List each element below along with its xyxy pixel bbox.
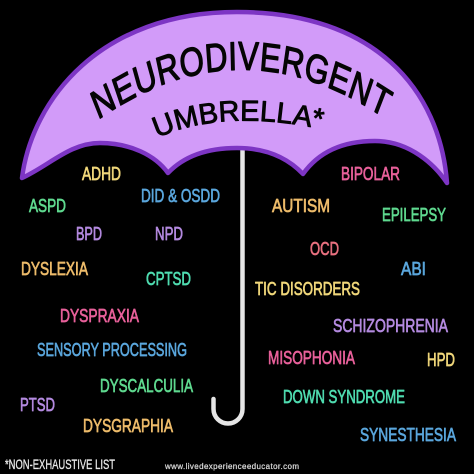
label: DYSGRAPHIA: DYSGRAPHIA	[83, 415, 173, 436]
icon: umbrella shaft and hook	[214, 148, 242, 424]
label: OCD: OCD	[310, 238, 339, 259]
label: ABI: ABI	[401, 258, 426, 279]
label: BIPOLAR: BIPOLAR	[341, 163, 400, 184]
label: NPD: NPD	[155, 223, 183, 244]
label: DYSPRAXIA: DYSPRAXIA	[60, 305, 139, 326]
label: MISOPHONIA: MISOPHONIA	[268, 347, 355, 368]
label: DOWN SYNDROME: DOWN SYNDROME	[283, 386, 405, 407]
label: ASPD: ASPD	[29, 195, 66, 216]
label: DYSLEXIA: DYSLEXIA	[21, 258, 88, 279]
footnote: *NON-EXHAUSTIVE LIST	[5, 457, 115, 472]
label: DID & OSDD: DID & OSDD	[141, 185, 220, 206]
label: DYSCALCULIA: DYSCALCULIA	[100, 375, 193, 396]
label: ADHD: ADHD	[82, 163, 121, 184]
title: NEURODIVERGENT	[90, 41, 394, 119]
website url: www.livedexperienceeducator.com	[164, 462, 299, 471]
label: PTSD: PTSD	[20, 394, 55, 415]
label: TIC DISORDERS: TIC DISORDERS	[255, 278, 360, 299]
label: EPILEPSY: EPILEPSY	[382, 204, 446, 225]
label: SENSORY PROCESSING: SENSORY PROCESSING	[37, 339, 187, 360]
label: HPD: HPD	[427, 349, 455, 370]
label: BPD: BPD	[76, 223, 102, 244]
subtitle: UMBRELLA*	[152, 100, 325, 136]
icon: umbrella canopy	[22, 12, 447, 183]
label: CPTSD: CPTSD	[146, 268, 191, 289]
label: AUTISM: AUTISM	[272, 195, 330, 216]
